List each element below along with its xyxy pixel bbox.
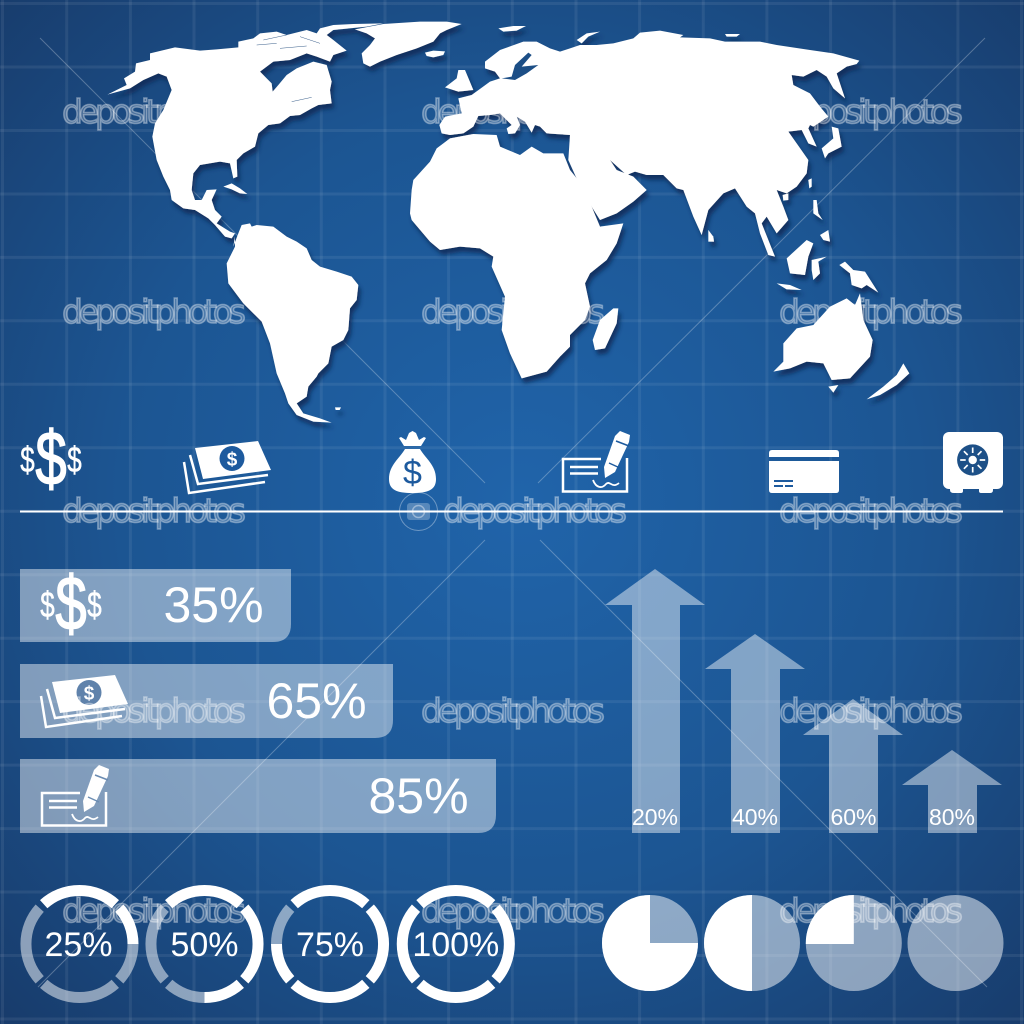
- icon: banknotes in bar: [41, 675, 128, 727]
- panel: bar 35%: [20, 561, 291, 647]
- ring 25%: 25%: [44, 926, 113, 964]
- watermarks: depositphotos: [62, 292, 246, 331]
- icon: banknotes: [184, 441, 271, 493]
- ring 25%: [26, 890, 133, 998]
- icon: safe: [943, 432, 1003, 493]
- arrow 60%: 60%: [830, 804, 877, 830]
- icon: cheque and pen: [563, 431, 630, 492]
- icon: banknotes: $: [227, 450, 238, 470]
- watermarks: depositphotos: [421, 292, 605, 331]
- watermarks: depositphotos: [421, 891, 605, 930]
- ring 75%: [276, 890, 384, 998]
- icon: dollar signs: [20, 416, 82, 502]
- watermarks: depositphotos: [443, 491, 627, 530]
- watermarks: depositphotos: [779, 292, 963, 331]
- ring 100%: [402, 890, 509, 998]
- icon: dollar signs in bar: $: [40, 585, 55, 625]
- icon: cheque and pen in bar: [42, 765, 109, 826]
- pie 75%: [602, 895, 698, 991]
- pie 50%: [704, 895, 800, 991]
- pie 0%: [908, 895, 1004, 991]
- icon: banknotes in bar: $: [84, 684, 95, 704]
- pie 25%: [806, 895, 902, 991]
- icon: dollar signs in bar: $: [87, 585, 102, 625]
- watermarks: depositphotos: [779, 691, 963, 730]
- panel: bar 35%: 35%: [163, 577, 264, 633]
- ring 50%: [151, 890, 258, 998]
- watermarks: depositphotos: [62, 92, 246, 131]
- watermarks: depositphotos: [62, 491, 246, 530]
- ring 50%: 50%: [170, 926, 239, 964]
- panel: bar 65%: 65%: [266, 673, 367, 729]
- icon: dollar signs in bar: [40, 561, 102, 647]
- arrow 40%: [705, 634, 805, 833]
- arctic channels: [257, 35, 320, 102]
- divider line: [20, 510, 1003, 512]
- watermarks: depositphotos: [421, 92, 605, 131]
- arrow chart: [605, 569, 1002, 833]
- arrow 40%: 40%: [732, 804, 778, 830]
- panel: bar 85%: [20, 759, 496, 833]
- arrow 20%: [605, 569, 705, 833]
- ring 75%: 75%: [296, 926, 364, 964]
- world map: [107, 22, 909, 423]
- arrow 80%: 80%: [929, 804, 975, 830]
- icon: money bag: $: [403, 454, 422, 492]
- icon: credit card: [769, 450, 839, 493]
- arrow 60%: [803, 699, 903, 833]
- watermarks: depositphotos: [779, 891, 963, 930]
- panel: bar 65%: [20, 664, 393, 738]
- icon: dollar signs: $: [67, 440, 82, 480]
- map water details: [502, 53, 538, 80]
- eurasia, africa and oceania: [410, 26, 909, 399]
- icon: dollar signs: $: [35, 416, 67, 502]
- icon: dollar signs in bar: $: [55, 561, 87, 647]
- icon: dollar signs: $: [20, 440, 35, 480]
- watermarks: depositphotos: [62, 691, 246, 730]
- panel: bar 85%: 85%: [368, 768, 469, 824]
- americas and Greenland: [107, 22, 462, 423]
- watermarks: depositphotos: [421, 691, 605, 730]
- watermarks: depositphotos: [779, 491, 963, 530]
- arrow 20%: 20%: [632, 804, 678, 830]
- watermarks: depositphotos: [62, 891, 246, 930]
- arrow 80%: [902, 750, 1002, 833]
- ring 100%: 100%: [412, 926, 499, 964]
- icon: money bag: [389, 431, 436, 493]
- watermarks: [62, 92, 963, 930]
- watermarks: depositphotos: [779, 92, 963, 131]
